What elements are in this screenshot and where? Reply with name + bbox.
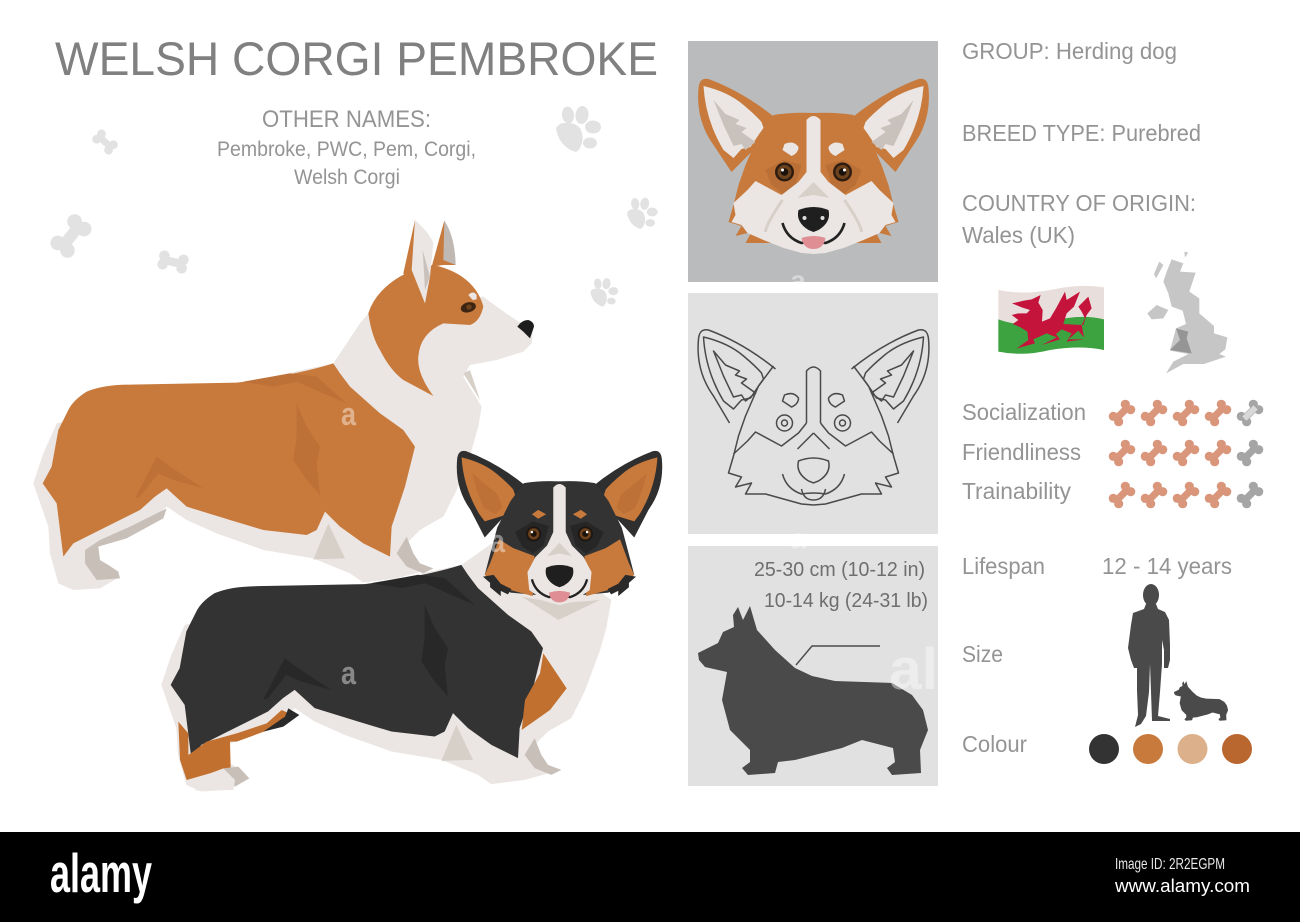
lifespan, size and colour labels <box>962 553 1232 757</box>
panel: silhouette with measurements <box>688 546 938 786</box>
lifespan, size and colour labels: Colour <box>962 731 1027 757</box>
watermarks: al <box>889 637 938 702</box>
panel: red face portrait <box>688 41 938 282</box>
panel: silhouette with measurements: 25-30 cm (10-12 in) <box>754 559 925 581</box>
other names text block: OTHER NAMES: <box>262 106 431 133</box>
rating bones: socialization <box>1107 398 1265 428</box>
other names text block: Welsh Corgi <box>294 166 400 189</box>
lifespan, size and colour labels: Size <box>962 641 1003 667</box>
breed facts text: COUNTRY OF ORIGIN: <box>962 190 1196 216</box>
watermarks: a <box>790 265 806 296</box>
breed facts text <box>962 38 1201 248</box>
breed facts text: GROUP: Herding dog <box>962 38 1177 64</box>
tricolor orange leg and chest <box>178 597 600 791</box>
icon: Welsh flag <box>998 286 1104 354</box>
ratings labels: Socialization <box>962 399 1086 425</box>
other names text block: Pembroke, PWC, Pem, Corgi, <box>217 138 476 161</box>
colour swatches <box>1089 734 1252 764</box>
tricolor head <box>457 451 662 605</box>
watermarks: a <box>790 523 806 554</box>
panel: line art face <box>688 293 938 534</box>
other names text block <box>217 106 476 189</box>
tricolor body <box>161 541 611 791</box>
breed facts text: BREED TYPE: Purebred <box>962 120 1201 146</box>
rating bones: friendliness <box>1107 438 1265 468</box>
tricolor corgi standing, looking at viewer <box>161 451 662 791</box>
lifespan, size and colour labels: 12 - 14 years <box>1102 553 1232 579</box>
footer band <box>0 832 1300 922</box>
footer band: alamy <box>50 842 152 904</box>
ratings labels: Friendliness <box>962 439 1081 465</box>
title: WELSH CORGI PEMBROKE <box>55 32 658 85</box>
rating bones: trainability <box>1107 480 1265 510</box>
watermarks: a <box>341 396 356 432</box>
decorative bones and paws <box>48 105 658 307</box>
watermarks: a <box>341 655 356 691</box>
footer band: www.alamy.com <box>1114 876 1250 896</box>
ratings labels <box>962 399 1086 504</box>
icon: human and dog size comparison <box>1128 584 1228 727</box>
red corgi standing in profile <box>33 220 534 590</box>
watermarks <box>341 265 938 702</box>
breed facts text: Wales (UK) <box>962 222 1075 248</box>
lifespan, size and colour labels: Lifespan <box>962 553 1045 579</box>
panel: silhouette with measurements: 10-14 kg (24-31 lb) <box>764 590 928 612</box>
footer band: Image ID: 2R2EGPM <box>1115 856 1225 873</box>
ratings labels: Trainability <box>962 478 1071 504</box>
watermarks: a <box>490 523 505 559</box>
icon: UK map with Wales highlighted <box>1147 252 1227 373</box>
